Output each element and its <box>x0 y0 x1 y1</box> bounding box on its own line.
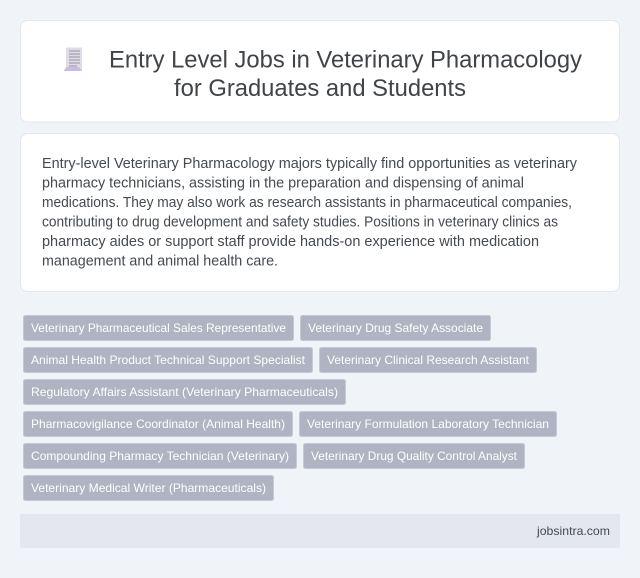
tag: Regulatory Affairs Assistant (Veterinary Pharmaceuticals) <box>31 385 338 399</box>
description text: Entry-level Veterinary Pharmacology majors typically find opportunities as veterinary <box>42 156 578 172</box>
tag: Veterinary Clinical Research Assistant <box>327 353 530 367</box>
panel: description <box>20 134 620 292</box>
description text: pharmacy aides or support staff provide hands-on experience with medication <box>42 234 539 250</box>
tag <box>24 476 274 500</box>
icon: paper scroll <box>64 48 82 71</box>
description text: pharmacy technicians, assisting in the preparation and dispensing of animal <box>42 176 524 192</box>
tag <box>24 380 346 404</box>
tag <box>24 316 294 340</box>
tag <box>24 444 296 468</box>
tag <box>24 412 292 436</box>
description text <box>42 156 578 270</box>
footer <box>20 514 620 548</box>
tag <box>24 348 312 372</box>
tag: Veterinary Drug Quality Control Analyst <box>311 449 518 463</box>
description text: medications. They may also work as research assistants in pharmaceutical companies, <box>42 195 572 211</box>
description text: contributing to drug development and safety studies. Positions in veterinary clinics as <box>42 214 558 230</box>
job tags <box>24 316 556 500</box>
title <box>109 46 582 102</box>
tag: Veterinary Medical Writer (Pharmaceuticals) <box>31 481 266 495</box>
tag: Veterinary Pharmaceutical Sales Representative <box>31 321 286 335</box>
tag <box>304 444 524 468</box>
tag: Animal Health Product Technical Support Specialist <box>31 353 306 367</box>
title: for Graduates and Students <box>174 75 466 102</box>
tag: Pharmacovigilance Coordinator (Animal Health) <box>31 417 285 431</box>
tag <box>320 348 536 372</box>
title: Entry Level Jobs in Veterinary Pharmacology <box>109 46 582 74</box>
tag: Veterinary Formulation Laboratory Technician <box>307 417 549 431</box>
tag <box>300 412 556 436</box>
footer source text: jobsintra.com <box>536 524 610 538</box>
tag: Veterinary Drug Safety Associate <box>308 321 483 335</box>
tag: Compounding Pharmacy Technician (Veterinary) <box>31 449 289 463</box>
tag <box>300 316 490 340</box>
description text: management and animal health care. <box>42 254 278 270</box>
panel: header <box>20 20 620 122</box>
